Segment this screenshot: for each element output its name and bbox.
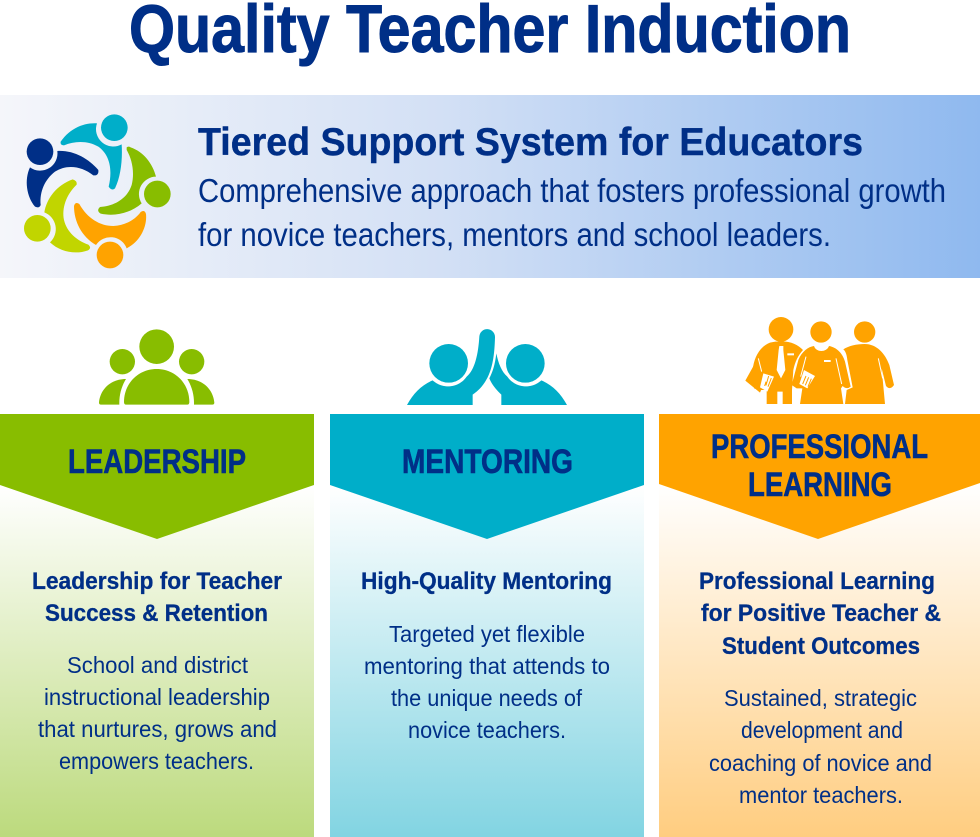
icon: mentoring high five xyxy=(407,329,567,405)
professional learning subheading: for Positive Teacher & xyxy=(701,600,941,627)
professional learning description: coaching of novice and xyxy=(709,750,932,776)
professional learning label: LEARNING xyxy=(748,466,892,504)
professional learning label xyxy=(711,428,928,504)
professional learning subheading xyxy=(699,568,941,660)
leadership subheading xyxy=(32,568,282,627)
mentoring description: mentoring that attends to xyxy=(364,653,610,679)
icon: professional learning educators xyxy=(745,317,894,404)
leadership description: that nurtures, grows and xyxy=(38,716,277,742)
leadership label: LEADERSHIP xyxy=(68,443,246,481)
mentoring description: the unique needs of xyxy=(391,685,583,711)
banner description xyxy=(198,172,946,253)
mentoring description: novice teachers. xyxy=(408,717,566,743)
panel: mentoring xyxy=(330,414,644,837)
panel: professional learning xyxy=(659,414,980,837)
panel: leadership xyxy=(0,414,314,837)
mentoring subheading: High-Quality Mentoring xyxy=(361,568,612,595)
leadership subheading: Leadership for Teacher xyxy=(32,568,282,595)
leadership subheading: Success & Retention xyxy=(45,600,268,627)
professional learning label: PROFESSIONAL xyxy=(711,428,928,466)
professional learning header chevron xyxy=(659,414,980,539)
professional learning description: Sustained, strategic xyxy=(724,685,917,711)
mentoring description: Targeted yet flexible xyxy=(389,621,585,647)
banner heading: Tiered Support System for Educators xyxy=(198,121,863,164)
professional learning subheading: Professional Learning xyxy=(699,568,935,595)
banner description: for novice teachers, mentors and school leaders. xyxy=(198,216,831,253)
professional learning subheading: Student Outcomes xyxy=(722,633,920,660)
leadership description: instructional leadership xyxy=(44,684,270,710)
icon: circle of five people logo xyxy=(24,114,171,268)
leadership description: School and district xyxy=(67,652,249,678)
mentoring description xyxy=(364,621,610,743)
professional learning description: development and xyxy=(741,717,903,743)
leadership header chevron xyxy=(0,414,314,539)
icon: leadership group of three xyxy=(99,329,214,405)
leadership description: empowers teachers. xyxy=(59,748,254,774)
mentoring header chevron xyxy=(330,414,644,539)
leadership description xyxy=(38,652,277,774)
panel: tiered support banner xyxy=(0,95,980,278)
mentoring label: MENTORING xyxy=(402,443,573,481)
professional learning description xyxy=(709,685,932,808)
professional learning description: mentor teachers. xyxy=(739,782,903,808)
